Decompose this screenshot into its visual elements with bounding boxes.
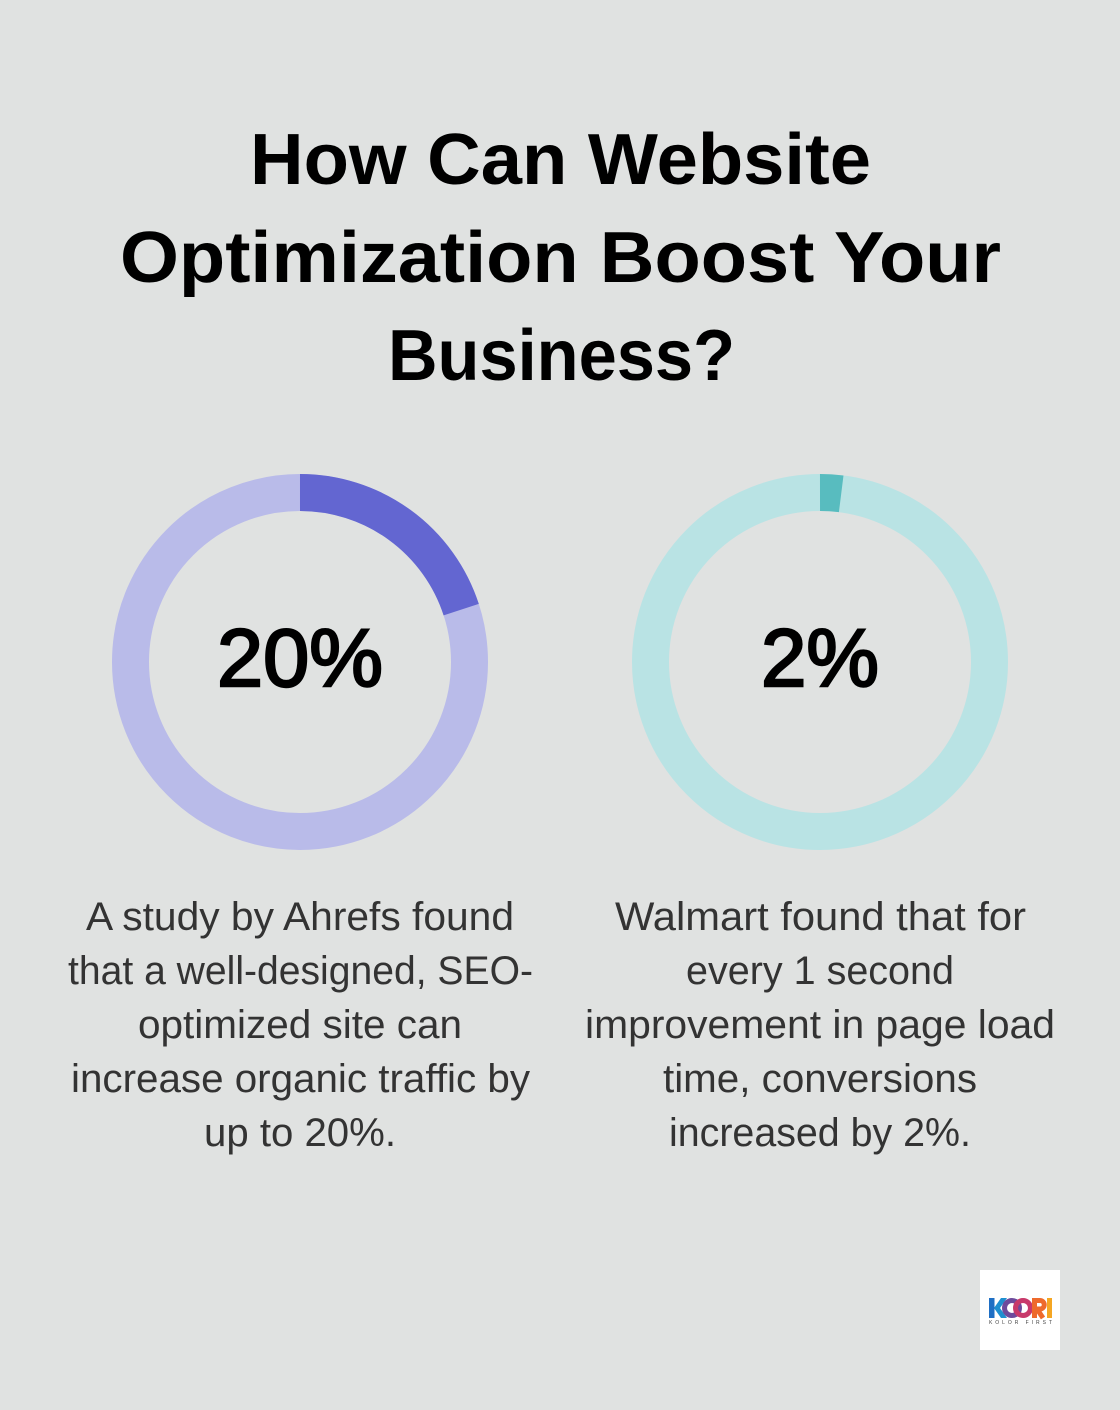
description: Ahrefs study: that a well-designed, SEO- — [68, 949, 533, 993]
title — [120, 120, 1001, 396]
panel: 2% statistic — [585, 492, 1055, 1155]
description: Walmart finding — [585, 895, 1055, 1155]
value: 2%: 2% — [761, 613, 879, 704]
description: Walmart finding: every 1 second — [686, 949, 954, 993]
title: How Can Website — [250, 120, 871, 200]
title: Business? — [388, 316, 735, 396]
description: Ahrefs study: optimized site can — [138, 1003, 462, 1047]
donut chart: 20% — [130, 492, 470, 832]
description: Ahrefs study: A study by Ahrefs found — [86, 895, 514, 939]
value: 20%: 20% — [217, 613, 383, 704]
logo: Koor1 Kolor First — [980, 1270, 1060, 1350]
logo: Koor1 Kolor First: KOLOR FIRST — [989, 1320, 1052, 1326]
donut chart: 2% — [650, 492, 990, 832]
description: Ahrefs study: increase organic traffic by — [71, 1057, 530, 1101]
description: Ahrefs study — [68, 895, 533, 1155]
description: Walmart finding: time, conversions — [663, 1057, 977, 1101]
description: Ahrefs study: up to 20%. — [204, 1111, 396, 1155]
title: Optimization Boost Your — [120, 218, 1001, 298]
description: Walmart finding: increased by 2%. — [669, 1111, 971, 1155]
description: Walmart finding: improvement in page load — [585, 1003, 1055, 1047]
panel: 20% statistic — [68, 492, 533, 1155]
description: Walmart finding: Walmart found that for — [615, 895, 1026, 939]
